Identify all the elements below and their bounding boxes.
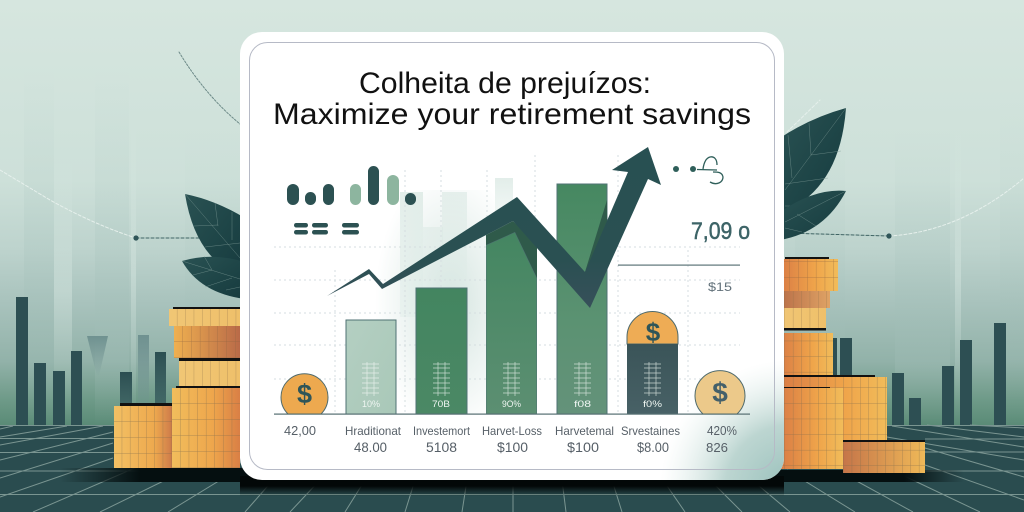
bar: coin-topped savings xyxy=(627,312,678,414)
bar: traditional xyxy=(346,320,396,414)
bar labels: Investemort xyxy=(413,424,471,438)
main card xyxy=(240,32,790,485)
coin block G xyxy=(780,291,830,308)
bar labels: 5108 xyxy=(426,440,457,455)
mini bar icons xyxy=(287,166,416,234)
coin: right xyxy=(695,371,745,414)
bar: harvest rate xyxy=(557,184,607,414)
title xyxy=(273,67,751,131)
coin: left: $ xyxy=(297,379,312,409)
bar: coin-topped savings: $ xyxy=(646,317,661,347)
right leaves xyxy=(780,108,846,240)
bar labels: Hraditionat xyxy=(345,424,402,438)
coin: right: $ xyxy=(712,377,728,408)
coin block J xyxy=(780,377,887,440)
bar: harvest-loss xyxy=(486,221,537,414)
bar labels: 420% xyxy=(707,424,737,438)
coin block H xyxy=(780,308,826,330)
bar: investment: 70B xyxy=(432,399,450,409)
coin block A xyxy=(114,403,172,468)
bar labels: Srvestaines xyxy=(621,424,680,438)
coin block C xyxy=(179,358,240,386)
leaf: lower right xyxy=(780,191,846,240)
dotted chart grid xyxy=(274,155,740,414)
bar labels xyxy=(284,424,737,455)
dashed connector lines xyxy=(0,52,1024,241)
coin block D xyxy=(174,326,240,358)
leaf: upper right xyxy=(780,108,846,214)
left skyline bars xyxy=(16,297,166,425)
right coin stacks xyxy=(780,257,925,473)
side value: $15 xyxy=(708,282,732,294)
left coin stacks xyxy=(114,307,240,468)
coin block B xyxy=(172,386,240,468)
bar labels: 48.00 xyxy=(354,440,387,455)
coin block L xyxy=(843,440,925,473)
trend arrow xyxy=(327,147,661,308)
side value: 7,09 o xyxy=(691,218,750,245)
title: Maximize your retirement savings xyxy=(273,98,751,131)
title: Colheita de prejuízos: xyxy=(359,67,651,100)
bar: coin-topped savings: f0% xyxy=(643,399,662,409)
bar labels: Harvetemal xyxy=(555,424,614,438)
coin block I xyxy=(780,333,875,378)
ghost background bars xyxy=(375,178,513,415)
bar: traditional: 10% xyxy=(362,399,380,409)
squiggle icon xyxy=(673,157,723,184)
bar labels: $100 xyxy=(567,440,599,455)
coin block E xyxy=(169,307,240,326)
bar chart xyxy=(274,184,750,415)
coin: left xyxy=(281,374,328,414)
bar labels: 42,00 xyxy=(284,424,316,438)
bar: harvest rate: f08 xyxy=(574,399,591,409)
bar: investment xyxy=(416,288,467,414)
right skyline bars xyxy=(832,323,1006,425)
bar labels: $8.00 xyxy=(637,440,669,455)
bar labels: 826 xyxy=(706,440,728,455)
leaf: lower left xyxy=(182,256,245,299)
bar: harvest-loss: 9O% xyxy=(502,399,521,409)
baseline xyxy=(274,414,750,415)
coin block F xyxy=(780,257,838,291)
shadow under coin stacks xyxy=(60,468,964,496)
left leaves xyxy=(182,194,245,299)
bar labels: Harvet-Loss xyxy=(482,424,542,438)
ground grid xyxy=(0,425,1024,512)
leaf: upper left xyxy=(185,194,245,278)
coin block K xyxy=(780,387,843,469)
bar labels: $100 xyxy=(497,440,528,455)
side value xyxy=(618,218,750,294)
